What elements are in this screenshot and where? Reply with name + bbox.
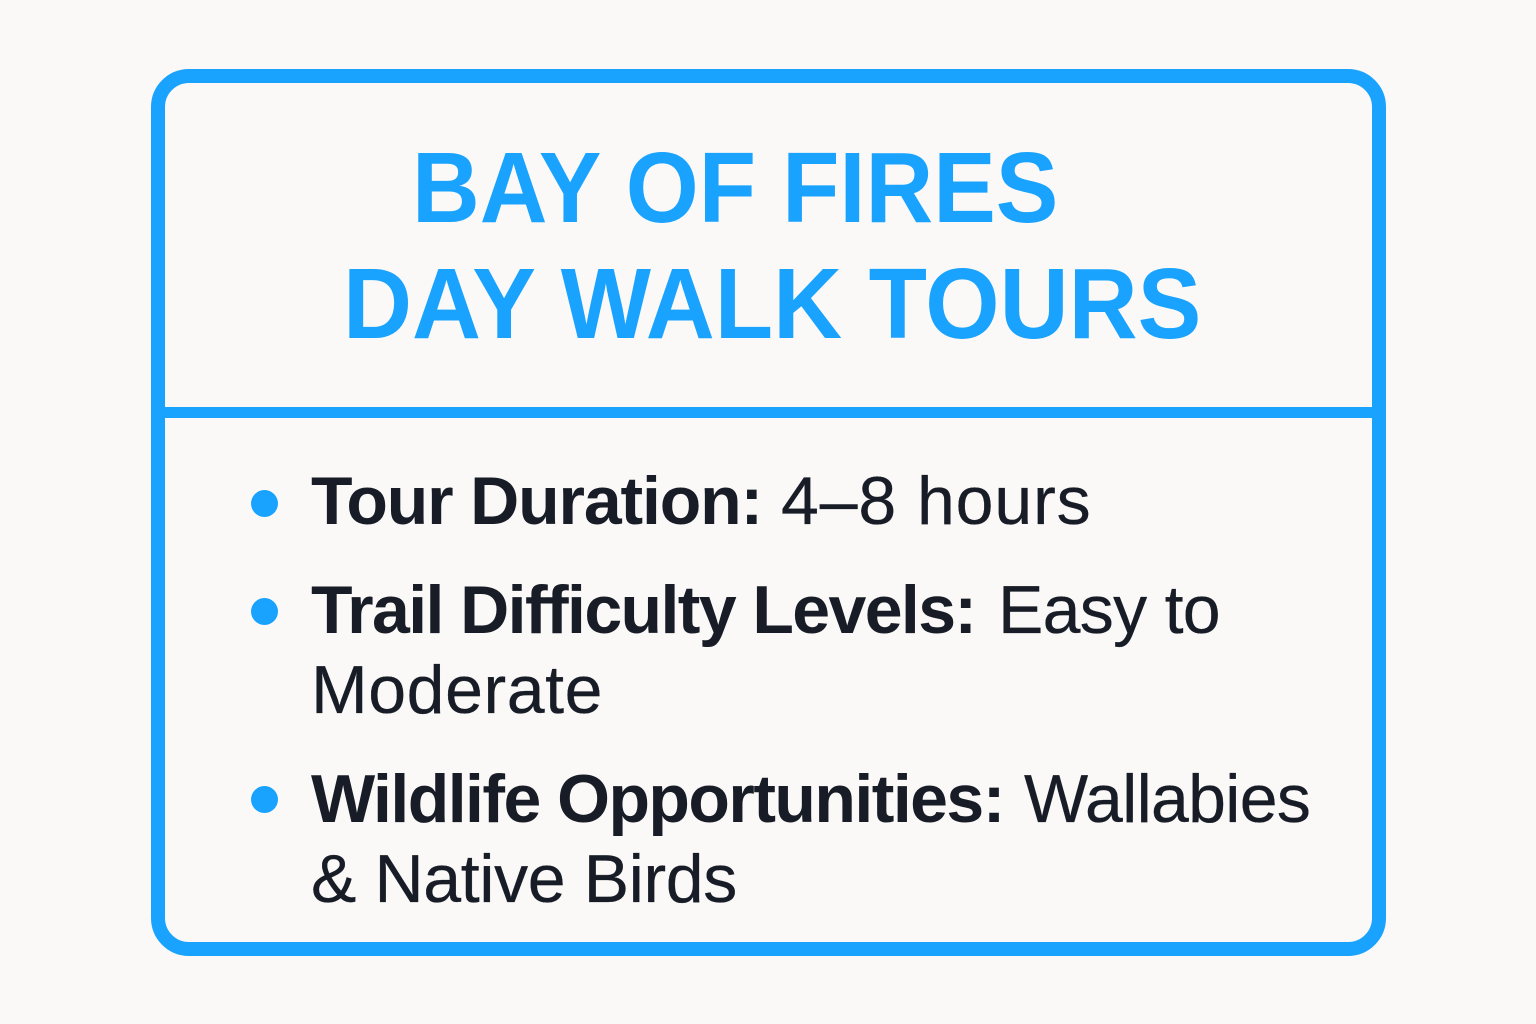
text: tour duration: Tour Duration:	[311, 463, 762, 539]
text: wildlife: & Native Birds	[311, 841, 737, 917]
list item: tour duration	[251, 463, 1092, 539]
text: trail difficulty: Easy to	[998, 572, 1220, 648]
title line 1: BAY OF FIRES	[412, 132, 1058, 244]
list item: trail difficulty	[251, 572, 1220, 728]
text: wildlife: Wildlife Opportunities:	[311, 761, 1004, 837]
icon: bullet	[251, 786, 278, 813]
text: wildlife: Wallabies	[1024, 761, 1310, 837]
icon: bullet	[251, 598, 278, 625]
text: trail difficulty: Moderate	[311, 652, 603, 728]
text: tour duration	[311, 463, 1092, 539]
text: trail difficulty	[311, 572, 1220, 728]
text: wildlife	[311, 761, 1310, 917]
text: trail difficulty: Trail Difficulty Levels:	[311, 572, 975, 648]
panel: tour card	[151, 69, 1386, 956]
icon: bullet	[251, 490, 278, 517]
text: tour duration: 4–8 hours	[781, 463, 1092, 539]
divider between heading and list	[158, 407, 1378, 418]
list item: wildlife	[251, 761, 1310, 917]
title line 2: DAY WALK TOURS	[343, 248, 1201, 360]
title	[343, 132, 1201, 360]
